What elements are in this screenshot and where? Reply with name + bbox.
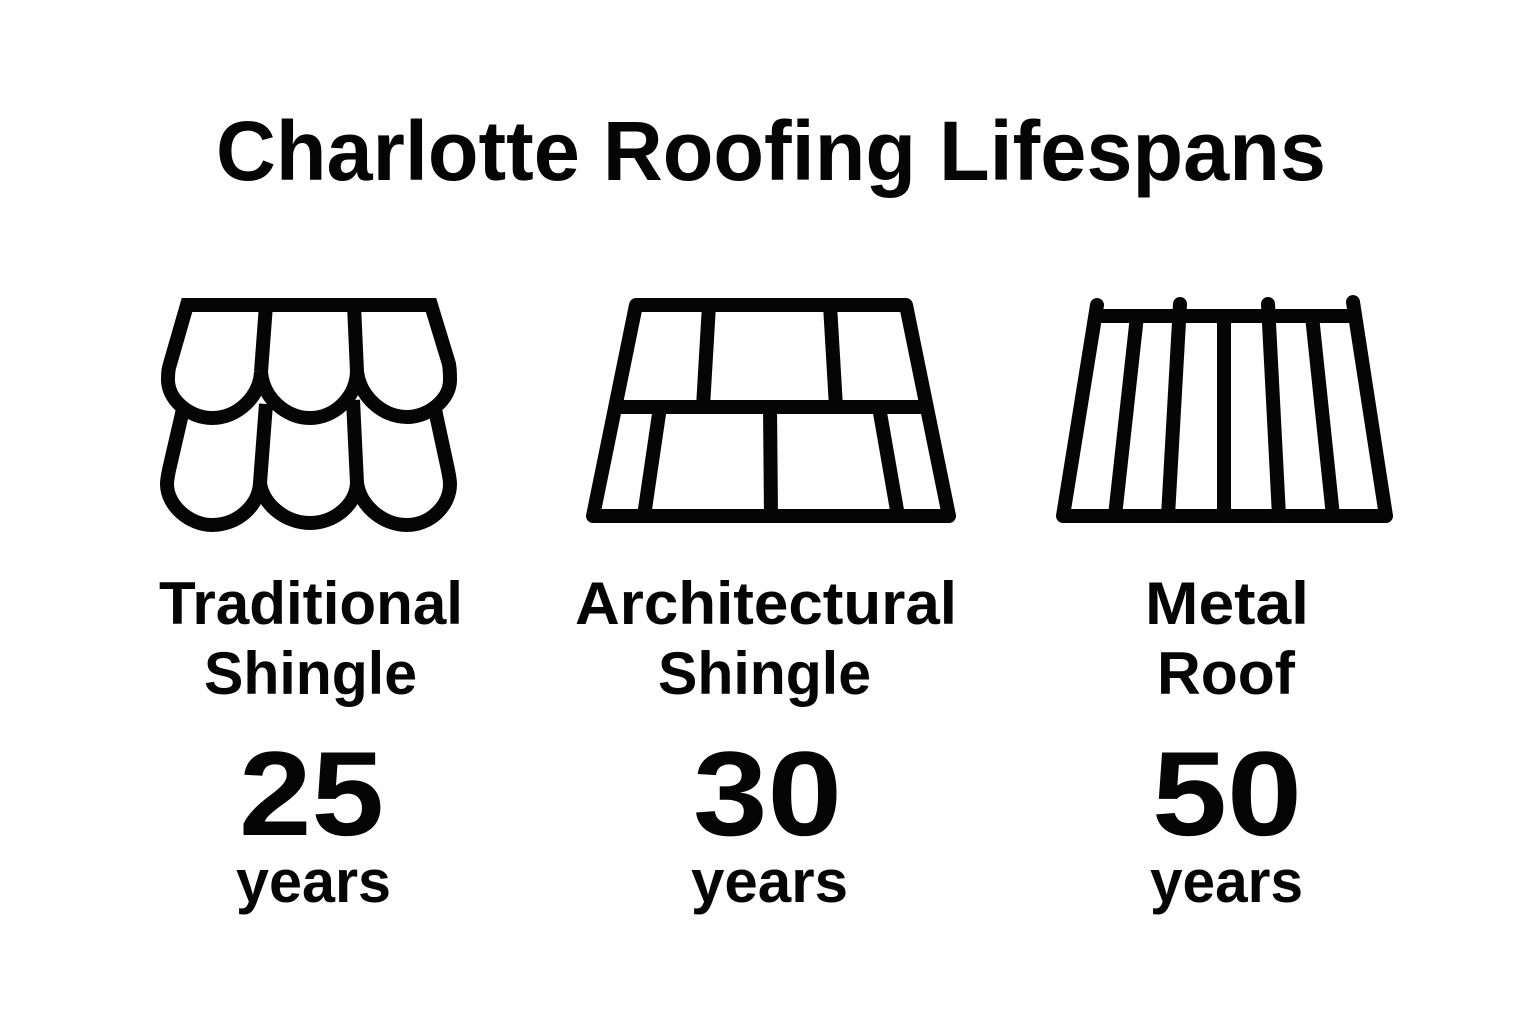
value: 25 years: years (236, 848, 391, 915)
label: architectural shingle: Architectural (575, 570, 957, 637)
panel: traditional shingle (159, 305, 463, 915)
value: 25 years (236, 727, 391, 915)
label: architectural shingle (575, 570, 957, 707)
value: 50 years: 50 (1152, 727, 1302, 861)
label: traditional shingle (159, 570, 463, 707)
label: metal roof: Metal (1145, 570, 1309, 637)
panel: architectural shingle (575, 305, 957, 915)
label: metal roof (1145, 570, 1309, 707)
label: traditional shingle: Traditional (159, 570, 463, 637)
icon: traditional shingle roof (167, 305, 450, 525)
label: metal roof: Roof (1157, 640, 1296, 707)
icon: metal roof (1063, 302, 1386, 516)
value: 30 years: 30 (693, 727, 842, 861)
value: 25 years: 25 (239, 727, 384, 861)
value: 50 years (1150, 727, 1303, 915)
value: 50 years: years (1150, 848, 1303, 915)
value: 30 years: years (691, 848, 848, 915)
label: architectural shingle: Shingle (658, 640, 871, 707)
panel: metal roof (1063, 302, 1386, 915)
icon: architectural shingle roof (593, 305, 949, 516)
value: 30 years (691, 727, 848, 915)
label: traditional shingle: Shingle (204, 640, 417, 707)
title: Charlotte Roofing Lifespans (216, 104, 1326, 198)
